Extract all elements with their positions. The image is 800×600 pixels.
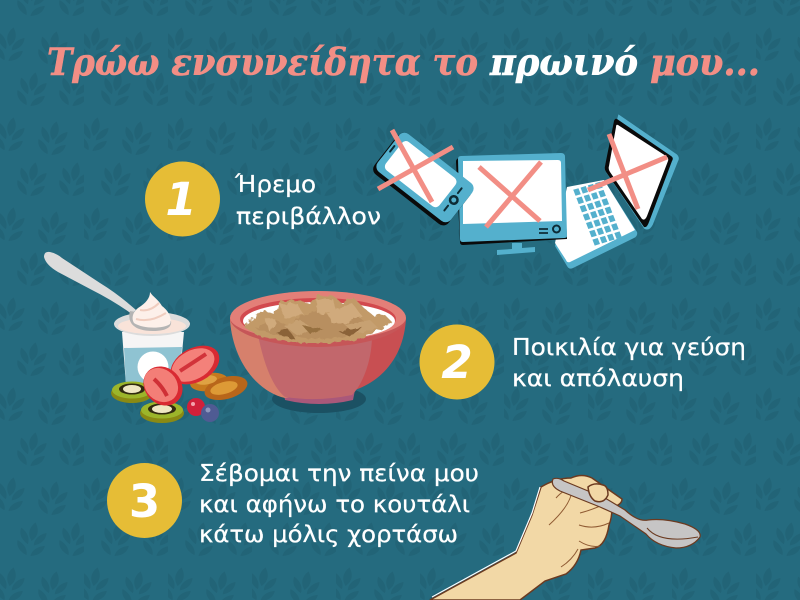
icon: monitor stand — [497, 243, 535, 255]
step 3 text: Σέβομαι την πείνα μου — [199, 461, 479, 487]
step 2 number badge: 2 — [441, 336, 473, 389]
icon: crossed-out devices — [370, 116, 678, 269]
icon: phone — [370, 129, 476, 228]
icon: fruit and nuts — [111, 338, 250, 423]
hand and arm — [430, 476, 622, 600]
yogurt cup body — [122, 332, 184, 385]
step 1 text — [234, 172, 381, 230]
icon: yogurt cup with spoon — [44, 252, 190, 385]
icon: bowl of cereal — [230, 291, 406, 413]
icon: keyboard — [555, 180, 637, 269]
title: Τρώω ενσυνείδητα το — [47, 40, 478, 84]
step 1 number badge: 1 — [165, 173, 197, 226]
icon: hand holding spoon — [430, 476, 700, 600]
step 2 text — [512, 335, 746, 392]
title: πρωινό — [489, 40, 638, 84]
step 3 text: και αφήνω το κουτάλι — [199, 492, 470, 518]
step 2 number badge — [420, 324, 494, 400]
step 2 text: Ποικιλία για γεύση — [512, 335, 746, 361]
icon: monitor — [456, 153, 567, 245]
step 3 number badge: 3 — [129, 475, 160, 528]
title: μου... — [650, 40, 760, 84]
title — [47, 40, 760, 84]
spoon — [44, 252, 136, 314]
whipped cream — [133, 292, 171, 328]
berries — [187, 398, 205, 416]
step 3 number badge — [107, 463, 182, 538]
cereal flakes — [243, 295, 392, 343]
kiwi slices — [111, 383, 153, 403]
step 1 text: Ήρεμο — [234, 172, 316, 198]
icon: red crosses — [378, 130, 667, 227]
step 1 text: περιβάλλον — [236, 204, 381, 230]
step 1 number badge — [145, 162, 220, 236]
step 3 text — [199, 461, 479, 548]
strawberries — [164, 338, 226, 392]
step 2 text: και απόλαυση — [512, 366, 684, 392]
thumb — [588, 484, 608, 502]
spoon — [552, 478, 700, 548]
almonds — [189, 370, 229, 394]
icon: tablet — [605, 116, 678, 228]
step 3 text: κάτω μόλις χορτάσω — [199, 522, 458, 548]
